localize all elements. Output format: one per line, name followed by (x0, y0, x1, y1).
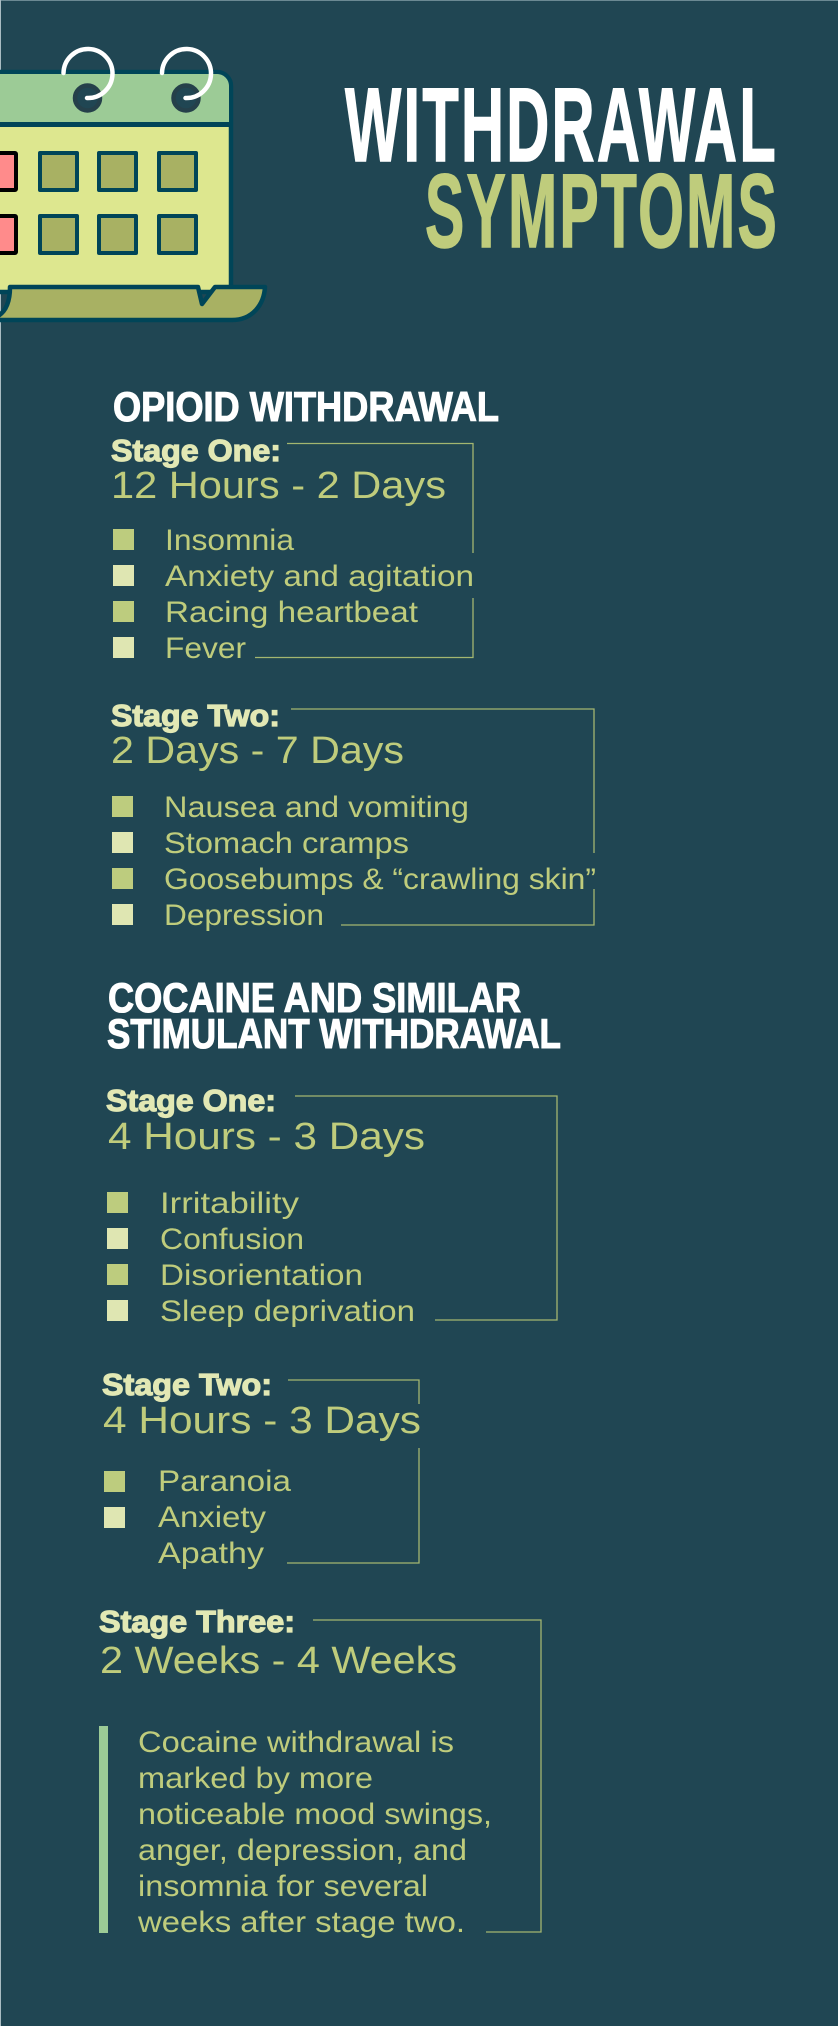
description text: marked by more (138, 1762, 373, 1795)
stage label: Stage Two: (102, 1367, 272, 1402)
bracket frame (295, 1096, 557, 1320)
stage label: Stage Three: (99, 1604, 295, 1639)
time range: 4 Hours - 3 Days (108, 1116, 425, 1158)
description text (137, 1726, 492, 1939)
symptom list (113, 524, 474, 665)
heading: cocaine and similar stimulant withdrawal: STIMULANT WITHDRAWAL (107, 1010, 561, 1057)
symptom list: Nausea and vomiting (164, 791, 469, 824)
description text: anger, depression, and (138, 1834, 467, 1867)
symptom list: Sleep deprivation (160, 1295, 415, 1328)
right binding ring (162, 49, 211, 110)
time range: 2 Days - 7 Days (111, 730, 404, 772)
description text: insomnia for several (138, 1870, 428, 1903)
symptom list: Confusion (160, 1223, 304, 1256)
description text: weeks after stage two. (137, 1906, 465, 1939)
title (345, 67, 779, 270)
calendar body (0, 72, 231, 292)
bracket frame (313, 1620, 541, 1932)
bracket frame (255, 444, 473, 658)
stage label: Stage Two: (111, 698, 280, 733)
symptom list (107, 1187, 415, 1328)
highlighted red days (0, 153, 16, 253)
panel: cocaine stage two (102, 1367, 421, 1570)
symptom list: Apathy (158, 1537, 264, 1570)
stage label: Stage One: (111, 433, 281, 468)
symptom list: Anxiety and agitation (165, 560, 474, 593)
symptom list: Goosebumps & “crawling skin” (164, 863, 596, 896)
symptom list: Paranoia (158, 1465, 291, 1498)
bracket frame (291, 709, 594, 925)
description text: noticeable mood swings, (138, 1798, 492, 1831)
heading: opioid withdrawal: OPIOID WITHDRAWAL (113, 383, 499, 430)
bracket frame (287, 1380, 419, 1563)
time range: 2 Weeks - 4 Weeks (100, 1640, 457, 1682)
description text: Cocaine withdrawal is (138, 1726, 454, 1759)
accent bar (99, 1726, 108, 1933)
time range: 4 Hours - 3 Days (103, 1400, 421, 1442)
symptom list (112, 791, 596, 932)
time range: 12 Hours - 2 Days (111, 465, 446, 507)
stage label: Stage One: (106, 1083, 276, 1118)
icon: calendar (0, 49, 265, 320)
left binding ring (64, 49, 112, 110)
calendar header band (0, 74, 229, 122)
symptom list: Anxiety (158, 1501, 266, 1534)
heading: cocaine and similar stimulant withdrawal: COCAINE AND SIMILAR (108, 974, 521, 1021)
symptom list: Insomnia (165, 524, 294, 557)
heading: cocaine and similar stimulant withdrawal (107, 974, 561, 1057)
symptom list: Fever (165, 632, 246, 665)
panel: cocaine stage one (106, 1083, 557, 1328)
symptom list: Racing heartbeat (165, 596, 419, 629)
panel: opioid stage one (111, 433, 474, 665)
panel: opioid stage two (111, 698, 596, 932)
symptom list: Irritability (160, 1187, 299, 1220)
panel: cocaine stage three (99, 1604, 541, 1939)
symptom list: Stomach cramps (164, 827, 409, 860)
symptom list: Disorientation (160, 1259, 363, 1292)
symptom list: Depression (164, 899, 324, 932)
curled bottom page (0, 287, 265, 320)
calendar day squares (40, 153, 196, 253)
symptom list (104, 1465, 291, 1570)
